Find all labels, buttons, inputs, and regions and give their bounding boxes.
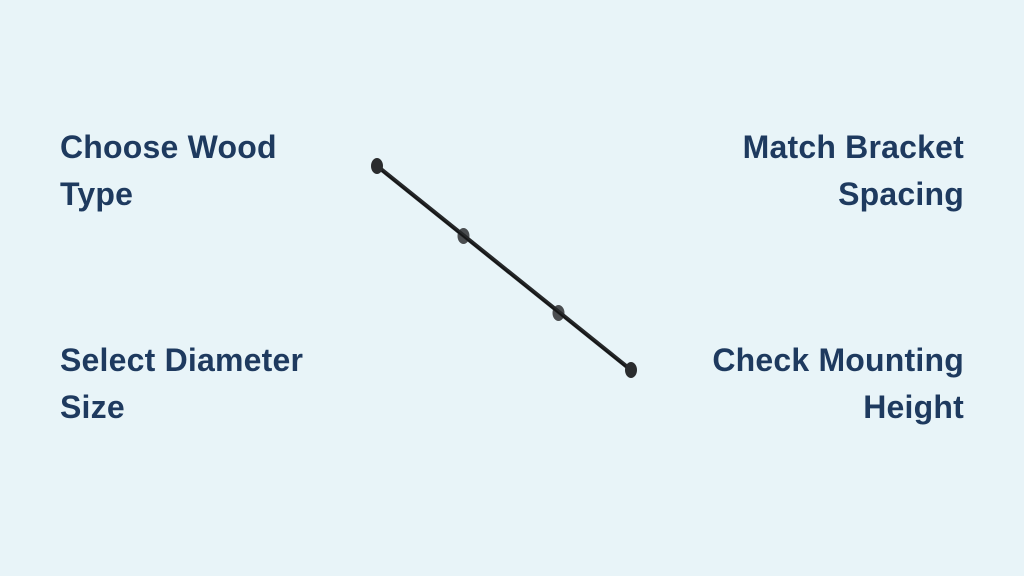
text block: select diameter size [60,342,303,425]
handrail rod [377,166,631,370]
text block: match bracket spacing [743,129,964,212]
text block: choose wood type: Type [60,176,133,212]
text block: choose wood type [60,129,277,212]
text block: match bracket spacing: Match Bracket [743,129,964,165]
rod shadow edge [377,167,631,371]
icon: end flange left [371,158,383,174]
icon: center bracket lower [552,305,564,321]
text block: check mounting height [712,342,964,425]
text block: choose wood type: Choose Wood [60,129,277,165]
text block: select diameter size: Select Diameter [60,342,303,378]
text block: check mounting height: Check Mounting [712,342,964,378]
text block: check mounting height: Height [863,389,964,425]
text block: select diameter size: Size [60,389,125,425]
icon: end flange right [625,362,637,378]
icon: center bracket upper [458,228,470,244]
text block: match bracket spacing: Spacing [838,176,964,212]
